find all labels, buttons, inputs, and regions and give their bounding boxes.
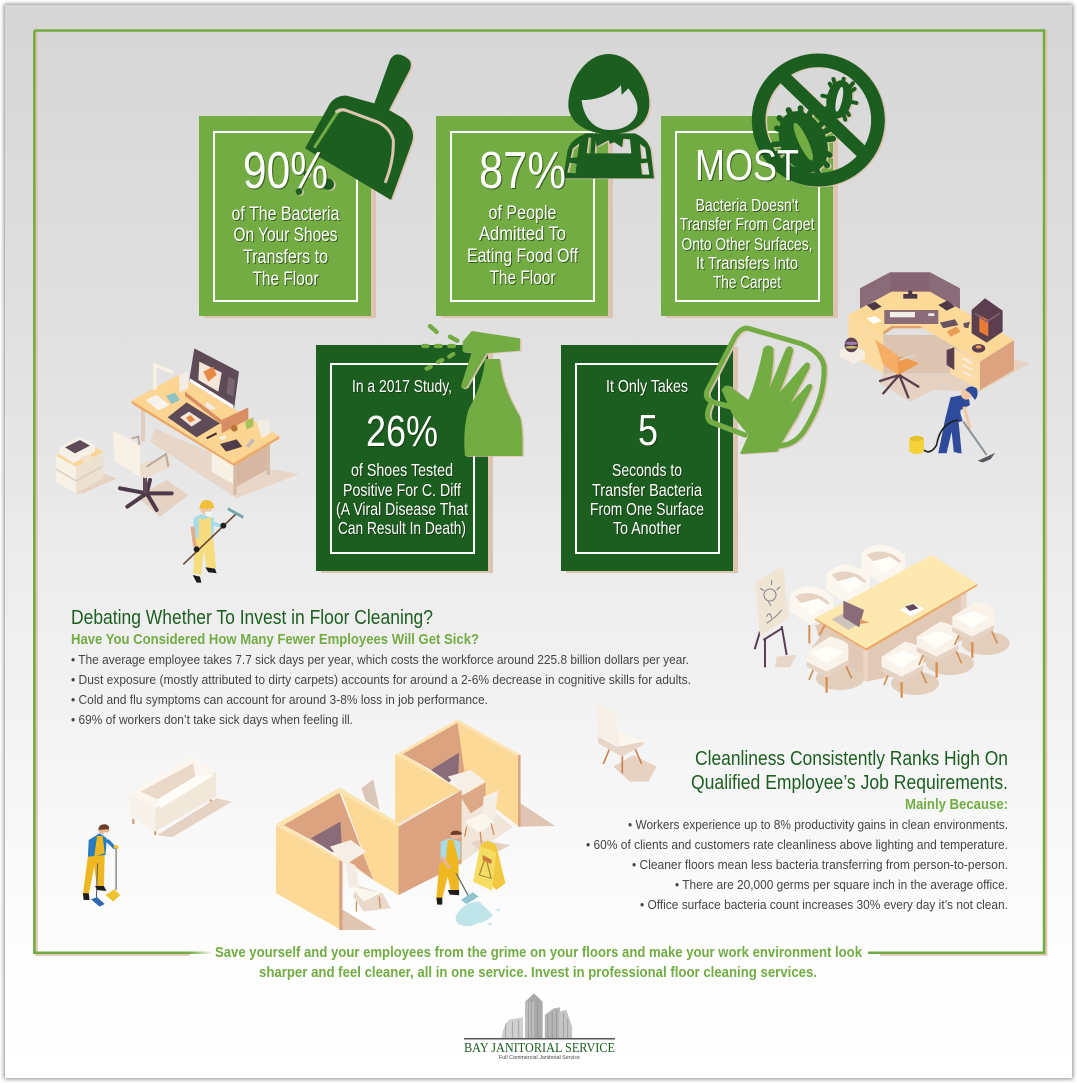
footer call to action: sharper and feel cleaner, all in one service. Invest in professional floor cleaning services. (259, 965, 817, 981)
illustration: conference table (755, 544, 1010, 698)
stat: 26%: 26% (366, 407, 438, 456)
heading: cleanliness ranks high: Qualified Employee’s Job Requirements. (691, 772, 1008, 794)
text: box three caption: Onto Other Surfaces, (682, 234, 812, 254)
logo: Bay Janitorial Service: BAY JANITORIAL SERVICE (464, 1041, 615, 1056)
stat: 87%: 87% (479, 142, 566, 200)
text: box five caption: To Another (613, 518, 681, 538)
text: box one caption: The Floor (252, 269, 319, 290)
icon: spray droplets (423, 326, 457, 369)
text block: sick day facts: • 69% of workers don’t take sick days when feeling ill. (71, 713, 353, 727)
text block: cleanliness facts: • Cleaner floors mean less bacteria transferring from person-to-person. (632, 858, 1008, 872)
icon: no bacteria sign (759, 60, 878, 186)
text: box five caption: From One Surface (590, 499, 704, 519)
text: box five caption: Seconds to (612, 460, 682, 480)
text block: sick day facts: • Cold and flu symptoms can account for around 3-8% loss in job performance. (71, 693, 488, 707)
text: box four caption: (A Viral Disease That (336, 499, 468, 519)
footer call to action: Save yourself and your employees from the grime on your floors and make your work environment look (215, 945, 863, 961)
panel: 87% of people (436, 54, 654, 318)
icon: dustpan (296, 54, 413, 200)
text: box three caption: Bacteria Doesn't (696, 195, 799, 215)
text: box two caption: of People (488, 203, 556, 224)
logo skyline (501, 993, 572, 1038)
logo: Bay Janitorial Service (464, 993, 615, 1061)
heading: cleanliness ranks high: Cleanliness Consistently Ranks High On (695, 748, 1008, 770)
heading: debating floor cleaning: Debating Whether To Invest in Floor Cleaning? (71, 607, 433, 629)
illustration: single chair (597, 703, 657, 782)
text block: sick day facts: • The average employee takes 7.7 sick days per year, which costs the workforce around 225.8 billion dollars per year. (71, 653, 689, 667)
panel: five seconds (561, 328, 824, 573)
illustration: vacuuming worker (909, 386, 993, 462)
illustration: mopping worker and wet floor sign (436, 831, 505, 926)
text: box two caption: Eating Food Off (467, 246, 579, 267)
text block: cleanliness facts: • There are 20,000 germs per square inch in the average office. (675, 878, 1008, 892)
text: box one caption (232, 204, 340, 290)
chair group: near side (807, 602, 1010, 698)
panel: most bacteria (661, 60, 878, 318)
text: box one caption: Transfers to (243, 247, 328, 268)
text: it only takes: It Only Takes (606, 376, 688, 396)
footer call to action (215, 945, 863, 981)
text: box two caption (467, 203, 579, 289)
text: box four caption: Can Result In Death) (338, 518, 466, 538)
panel: 90% of bacteria (199, 54, 413, 318)
illustration: dustpan worker (83, 824, 120, 907)
chair group: far side (790, 544, 905, 643)
text: box four caption (336, 460, 468, 538)
heading: cleanliness ranks high (691, 748, 1008, 794)
illustration: office cubicles (276, 719, 555, 930)
illustration: sofa (129, 757, 232, 837)
subheading: fewer employees sick: Have You Considered How Many Fewer Employees Will Get Sick? (71, 631, 479, 648)
text: box four caption: Positive For C. Diff (343, 480, 461, 500)
logo: Bay Janitorial Service: Full Commercial Janitorial Service (499, 1055, 580, 1061)
text: box three caption (680, 195, 815, 292)
text: box one caption: of The Bacteria (232, 204, 340, 225)
subheading: mainly because: Mainly Because: (905, 796, 1008, 813)
text: box five caption: Transfer Bacteria (592, 480, 702, 500)
illustration: window cleaning worker (183, 500, 244, 583)
stat: 90%: 90% (243, 142, 328, 200)
icon: glove and cloth (706, 328, 824, 454)
text: study intro: In a 2017 Study, (352, 376, 452, 396)
text: box three caption: The Carpet (713, 272, 781, 292)
stat: most: MOST (695, 141, 799, 190)
text: box three caption: It Transfers Into (696, 253, 798, 273)
text block: cleanliness facts (586, 818, 1008, 912)
text: box three caption: Transfer From Carpet (680, 214, 815, 234)
text block: sick day facts (71, 653, 691, 727)
icon: person in apron (563, 54, 654, 178)
text: box five caption (590, 460, 704, 538)
text block: cleanliness facts: • 60% of clients and customers rate cleanliness above lighting and temperature. (586, 838, 1008, 852)
text: box two caption: The Floor (490, 268, 556, 289)
stat: 5: 5 (638, 406, 658, 455)
text block: sick day facts: • Dust exposure (mostly attributed to dirty carpets) accounts for around a 2-6% decrease in cognitive skills for adults. (71, 673, 691, 687)
text: box one caption: On Your Shoes (234, 225, 338, 246)
text block: cleanliness facts: • Office surface bacteria count increases 30% every day it’s not clean. (640, 898, 1008, 912)
text: box two caption: Admitted To (479, 224, 566, 245)
panel: 2017 study (316, 326, 523, 573)
illustration: corner office desk (840, 272, 1030, 402)
illustration: left office desk (56, 348, 299, 517)
icon: spray bottle (461, 331, 523, 456)
text block: cleanliness facts: • Workers experience up to 8% productivity gains in clean environments. (628, 818, 1008, 832)
text: box four caption: of Shoes Tested (351, 460, 453, 480)
